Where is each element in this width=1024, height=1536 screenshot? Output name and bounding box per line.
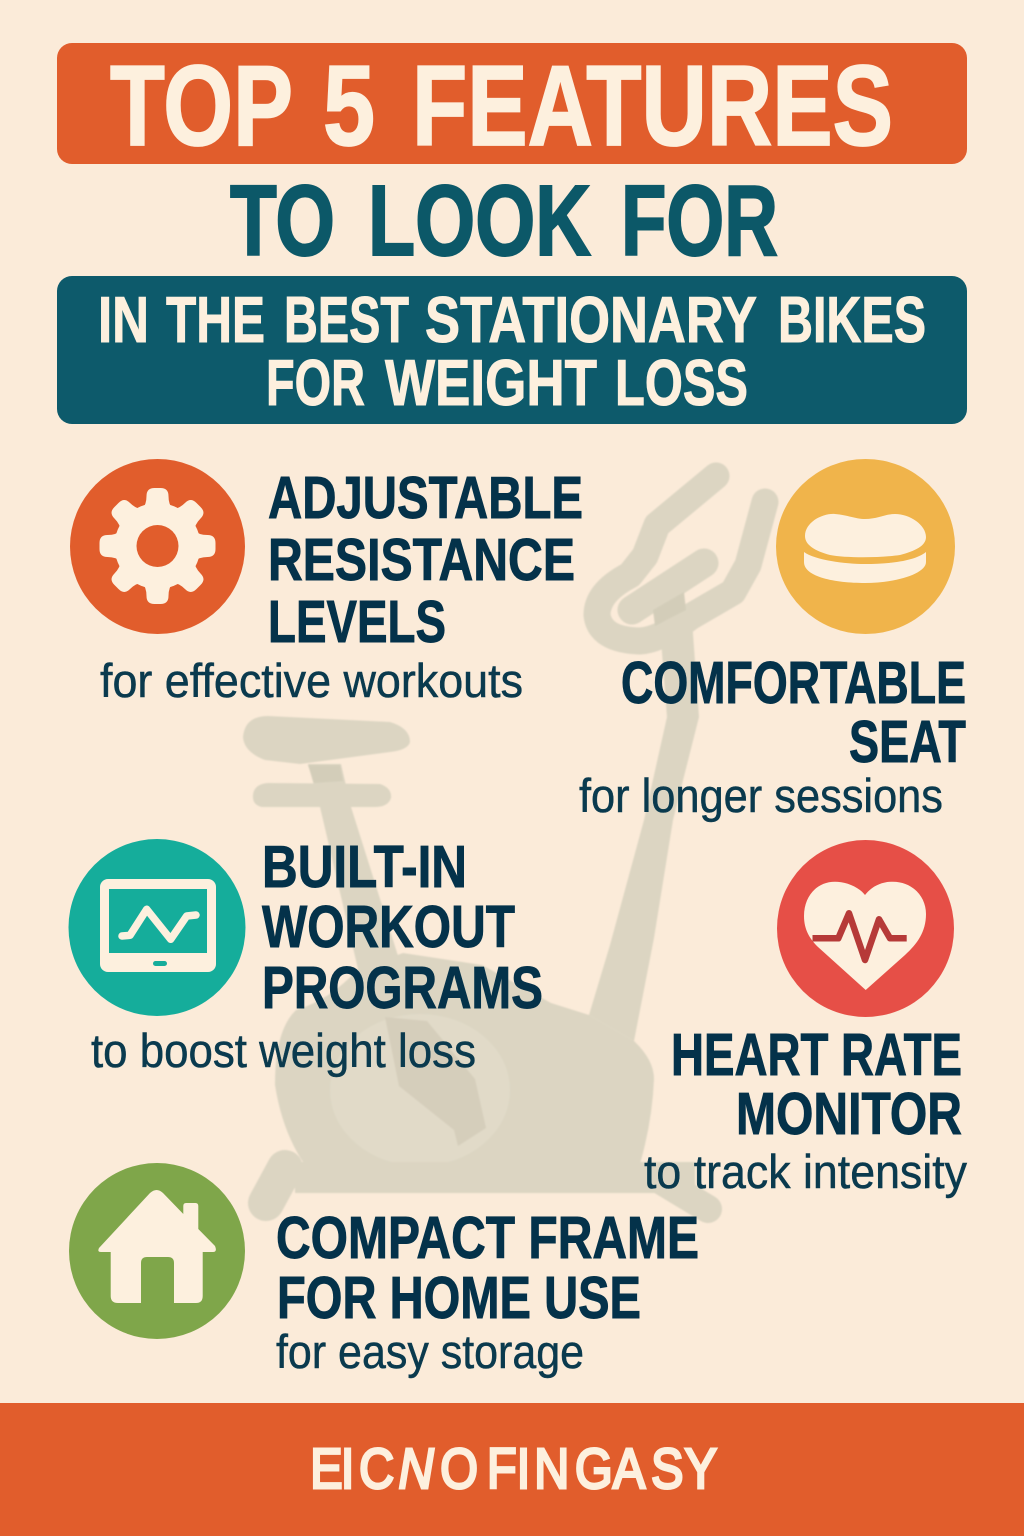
heading: MONITOR <box>736 1081 962 1147</box>
heading <box>268 465 583 655</box>
bike body and flywheel <box>275 953 654 1193</box>
title banner: 5 <box>323 43 375 170</box>
subtitle banner: FOR <box>266 346 365 419</box>
icon: monitor <box>68 839 246 1016</box>
title banner: TOP <box>110 43 293 170</box>
heading: FOR HOME USE <box>277 1265 641 1331</box>
bike base and feet <box>266 1162 708 1209</box>
heading: to look for: LOOK <box>368 165 591 277</box>
feature: compact frame for home use <box>69 1163 699 1378</box>
heading <box>621 650 966 775</box>
subtitle banner: BIKES <box>778 283 926 356</box>
heading: WORKOUT <box>262 894 515 960</box>
description: for effective workouts <box>100 654 523 707</box>
subtitle banner: IN <box>98 283 149 356</box>
bike upright post <box>589 620 699 1041</box>
icon: seat <box>776 459 955 634</box>
description: for easy storage <box>276 1325 584 1378</box>
heading <box>671 1022 962 1147</box>
subtitle banner: WEIGHT <box>385 346 597 419</box>
description: for longer sessions <box>579 769 943 822</box>
feature: heart rate monitor <box>644 840 967 1198</box>
heading: RESISTANCE <box>268 527 575 593</box>
footer band: EICNOFINGASY <box>310 1437 717 1501</box>
heading: SEAT <box>849 709 966 775</box>
heading: to look for <box>230 165 778 277</box>
title banner: FEATURES <box>412 43 893 170</box>
subtitle banner: THE <box>166 283 265 356</box>
heading: BUILT-IN <box>262 834 467 900</box>
bike saddle <box>243 716 410 969</box>
heading <box>262 834 543 1021</box>
heading: LEVELS <box>268 589 446 655</box>
background illustration: stationary bike <box>243 476 765 1209</box>
description: to track intensity <box>644 1145 967 1198</box>
heading: PROGRAMS <box>262 955 543 1021</box>
subtitle banner: BEST <box>284 283 409 356</box>
bike handlebars <box>597 476 765 641</box>
heading: ADJUSTABLE <box>268 465 583 531</box>
feature: built-in workout programs <box>68 834 543 1077</box>
subtitle banner <box>57 276 967 424</box>
icon: gear <box>70 459 245 634</box>
feature: comfortable seat <box>579 459 966 822</box>
heading: to look for: TO <box>230 165 335 277</box>
footer band <box>0 1403 1024 1536</box>
subtitle banner: STATIONARY <box>425 283 757 356</box>
subtitle banner: LOSS <box>615 346 748 419</box>
feature: adjustable resistance levels <box>70 459 583 707</box>
icon: house <box>69 1163 245 1339</box>
heading: to look for: FOR <box>621 165 778 277</box>
icon: heart with pulse <box>777 840 954 1017</box>
description: to boost weight loss <box>91 1024 476 1077</box>
title banner <box>57 43 967 170</box>
heading <box>276 1205 699 1331</box>
heading: COMPACT FRAME <box>276 1205 699 1271</box>
